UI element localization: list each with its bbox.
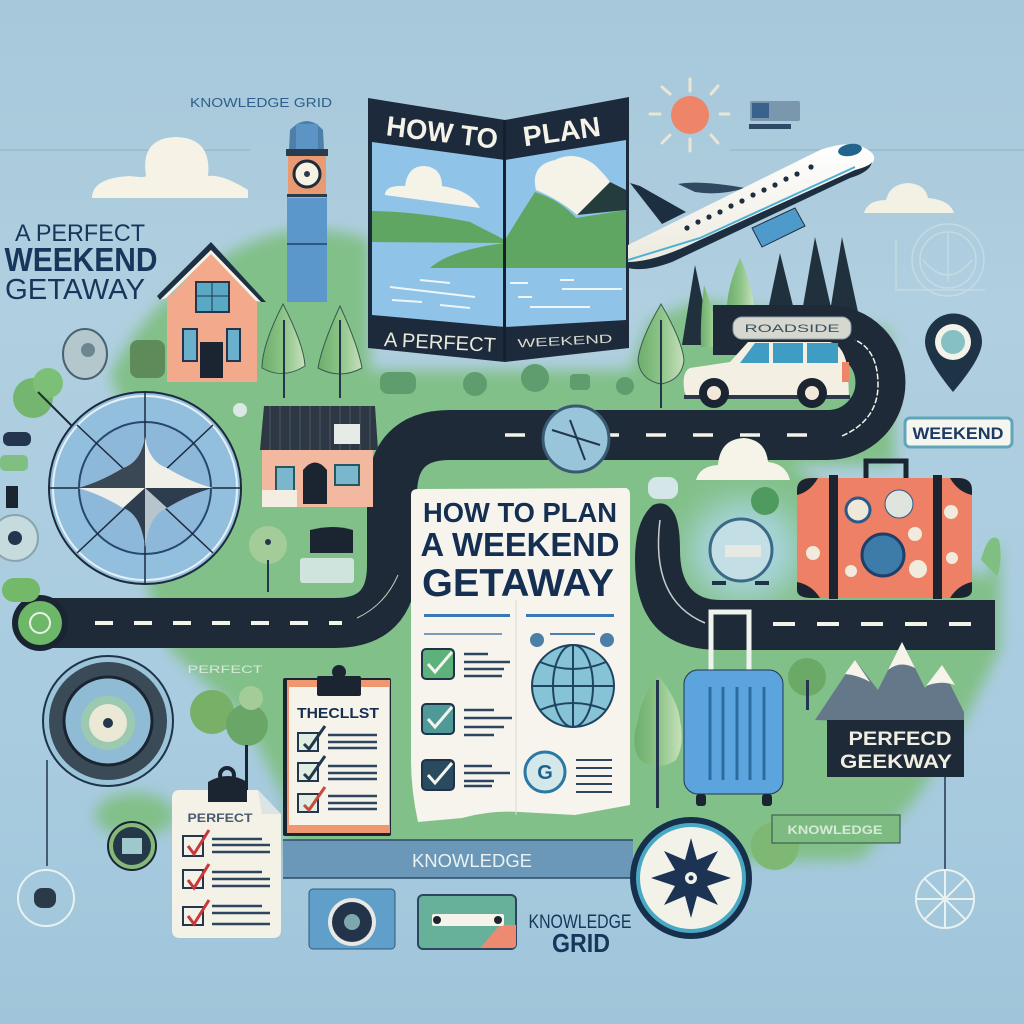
small clock icon [710, 519, 772, 585]
dial left lower [43, 656, 173, 866]
small dark house [260, 406, 378, 507]
ticket icon [418, 895, 516, 949]
central poster: GETAWAY [422, 562, 614, 605]
small plane icon [749, 101, 800, 129]
lower right road [635, 503, 995, 650]
checklist second [172, 768, 281, 938]
knowledge banner: KNOWLEDGE [412, 851, 532, 871]
airplane [628, 142, 874, 269]
trees near house [262, 304, 362, 398]
knowledge label right: KNOWLEDGE [788, 823, 882, 837]
dark centre of left badge [34, 888, 56, 908]
top label: knowledge grid: KNOWLEDGE GRID [190, 95, 332, 110]
tree by blue suitcase [634, 658, 826, 808]
small dial [108, 822, 156, 870]
poster seal: G [537, 762, 553, 784]
compass lower right [630, 817, 752, 939]
small road compass [543, 406, 609, 472]
small map icons row [233, 364, 634, 417]
central poster: HOW TO PLAN [423, 497, 617, 528]
mountain sign [815, 642, 964, 870]
icon: sun [650, 79, 729, 151]
camera icon [309, 889, 395, 949]
folded map with how to plan: HOW TO [385, 110, 500, 155]
suitcase orange [797, 461, 972, 599]
left small badges [0, 432, 68, 651]
lighthouse tower [286, 121, 328, 302]
central poster [411, 488, 630, 822]
blue wash around road bend [690, 500, 800, 600]
folded map with how to plan [368, 97, 629, 362]
outlined badges [18, 870, 974, 928]
green dots near road [648, 477, 1001, 576]
side title: WEEKEND [4, 241, 158, 278]
green land [95, 230, 1000, 862]
weekend tag: WEEKEND [912, 424, 1004, 443]
left tree [13, 368, 74, 428]
folded map with how to plan: WEEKEND [517, 331, 613, 350]
poster checklist [422, 649, 512, 790]
checklist second: PERFECT [188, 811, 253, 825]
side title [4, 220, 158, 306]
icon: location pin [925, 314, 982, 392]
cloud left [92, 137, 248, 198]
car: ROADSIDE [744, 323, 840, 335]
tree cluster [190, 686, 268, 790]
pine trees [682, 237, 858, 345]
folded map with how to plan: PLAN [521, 111, 602, 152]
coin badge [63, 329, 165, 379]
knowledge label right [751, 815, 900, 870]
cloud right [864, 183, 954, 213]
blue suitcase [684, 612, 783, 806]
checklist clipboard: THECLLST [297, 705, 379, 722]
weekend tag [905, 418, 1012, 447]
house top left [157, 242, 266, 382]
car [684, 317, 851, 408]
knowledge banner [283, 840, 633, 878]
mountain sign: GEEKWAY [840, 752, 952, 773]
cloud mid [696, 438, 790, 480]
side title: GETAWAY [5, 274, 145, 306]
folded map with how to plan: A PERFECT [383, 329, 496, 357]
small logo text [528, 912, 632, 958]
side title: A PERFECT [15, 220, 145, 247]
compass left [49, 392, 241, 584]
poster seal [525, 752, 612, 792]
small logo text: GRID [552, 928, 610, 958]
green trees right [638, 258, 754, 408]
small logo text: KNOWLEDGE [528, 912, 632, 933]
road network [40, 330, 880, 623]
checklist clipboard [283, 665, 391, 836]
central poster: A WEEKEND [420, 526, 620, 563]
mountain sign: PERFECD [848, 729, 952, 750]
small tree and card near house [249, 526, 354, 592]
poster map seals [530, 633, 614, 647]
poster globe [532, 645, 614, 727]
label perfect: PERFECT [188, 664, 263, 676]
faint globe icon right [896, 224, 985, 296]
